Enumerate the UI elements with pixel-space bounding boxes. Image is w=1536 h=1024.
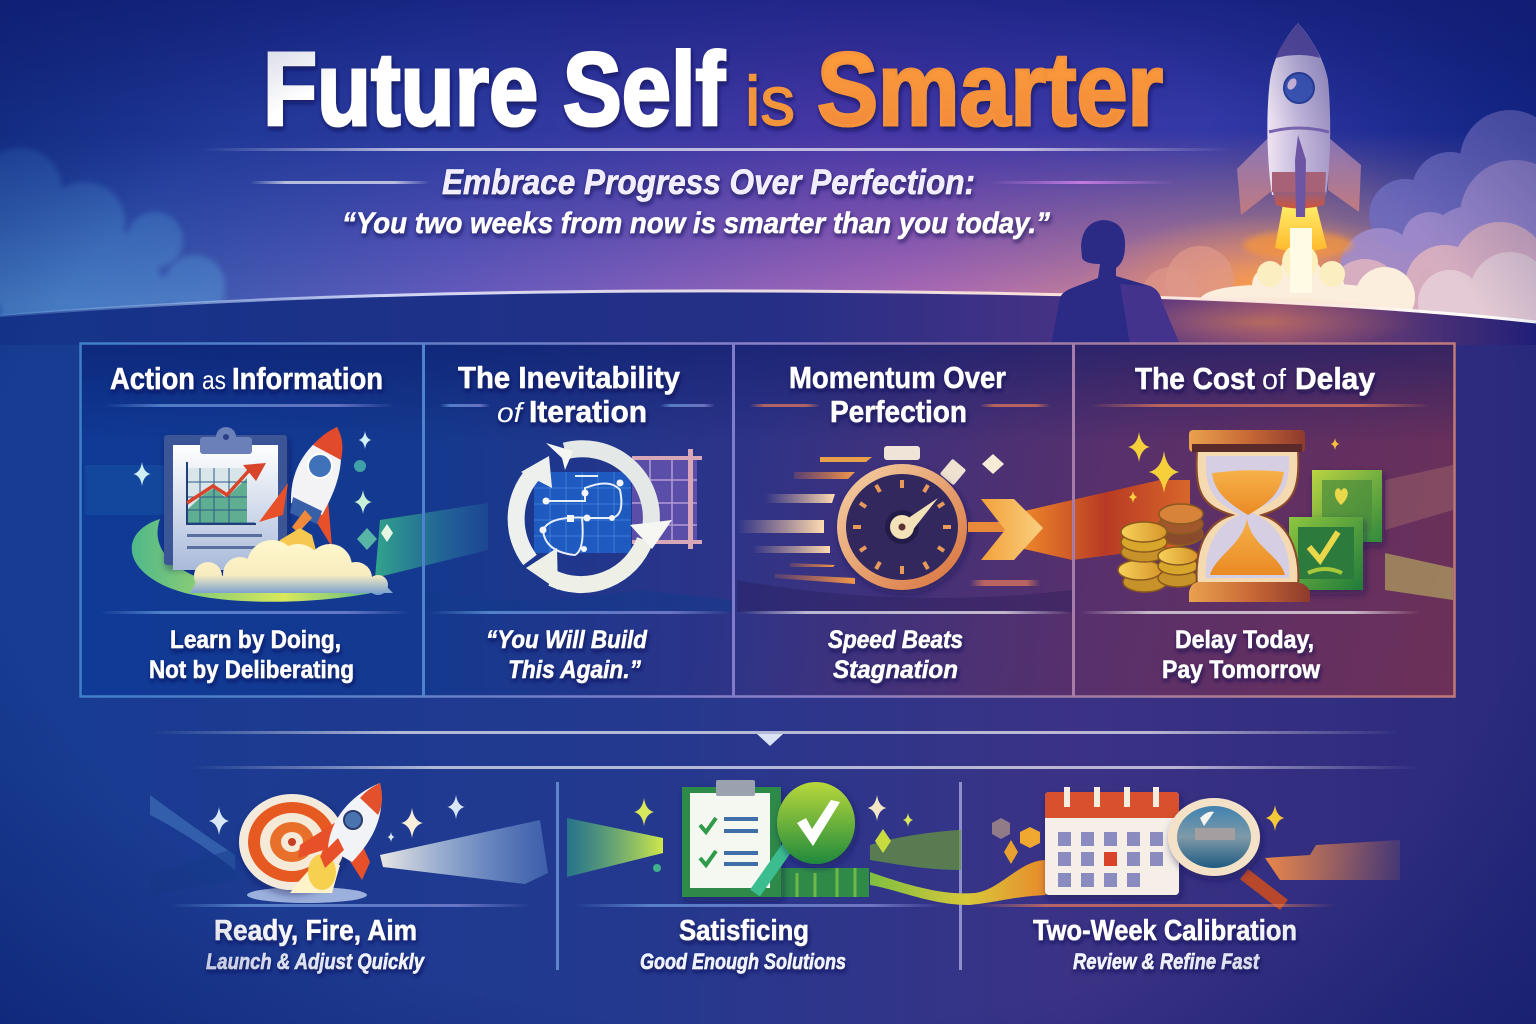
- heading: [458, 360, 681, 429]
- title: [263, 32, 1163, 148]
- caption: “You Will Build: [486, 626, 648, 654]
- label: Review & Refine Fast: [1073, 949, 1260, 974]
- card: momentum over perfection: [737, 360, 1070, 684]
- icon: stopwatch with speed lines: [737, 446, 1043, 590]
- heading: Information: [232, 361, 383, 396]
- caption: Stagnation: [833, 656, 958, 684]
- label: [640, 915, 846, 974]
- caption: Learn by Doing,: [170, 626, 341, 654]
- heading: of: [1262, 364, 1287, 396]
- ribbons: [150, 795, 1400, 905]
- heading: Iteration: [529, 394, 647, 429]
- title: Smarter: [817, 32, 1163, 148]
- card: cost of delay: [1080, 361, 1430, 684]
- heading: as: [202, 365, 226, 395]
- subtitle: Embrace Progress Over Perfection:: [442, 163, 975, 202]
- card: inevitability of iteration: [430, 360, 730, 684]
- clouds: right: [1142, 110, 1536, 334]
- heading: of: [497, 397, 525, 428]
- panel: four concept cards: [80, 343, 1455, 697]
- title: is: [745, 62, 795, 140]
- background: ground: [0, 291, 1536, 1024]
- icon: target and rocket: [209, 783, 465, 903]
- background: sky: [0, 0, 1486, 316]
- label: Ready, Fire, Aim: [214, 915, 417, 947]
- caption: Pay Tomorrow: [1162, 656, 1321, 684]
- label: [206, 915, 425, 974]
- icon: hourglass, coins and cards: [1118, 430, 1382, 602]
- subtitle: “You two weeks from now is smarter than you today.”: [342, 207, 1050, 240]
- heading: [789, 360, 1006, 429]
- caption: This Again.”: [508, 656, 641, 684]
- practice: satisficing: [575, 780, 945, 974]
- caption: [1162, 626, 1321, 684]
- rocket launch: [1237, 23, 1361, 293]
- label: Launch & Adjust Quickly: [206, 949, 425, 974]
- card: action as information: [100, 361, 410, 684]
- heading: [110, 361, 383, 396]
- title: Future Self: [263, 32, 725, 148]
- heading: Delay: [1295, 361, 1376, 396]
- heading: Perfection: [830, 394, 967, 429]
- caption: Delay Today,: [1175, 626, 1314, 654]
- heading: The Inevitability: [458, 360, 681, 395]
- subtitle: [342, 163, 1050, 240]
- practice: ready, fire, aim: [170, 783, 530, 974]
- heading: [1135, 361, 1376, 396]
- label: Satisficing: [679, 915, 809, 947]
- person silhouette: [1051, 220, 1180, 345]
- icon: checklist and check badge: [634, 780, 913, 897]
- panel: three practices: [150, 780, 1400, 974]
- caption: [486, 626, 648, 684]
- arrow: notch pointing down: [757, 734, 783, 746]
- heading: The Cost: [1135, 361, 1255, 396]
- label: Two-Week Calibration: [1033, 915, 1297, 947]
- heading: Momentum Over: [789, 360, 1006, 395]
- icon: calendar and magnifier: [992, 787, 1284, 905]
- caption: Speed Beats: [828, 626, 963, 654]
- caption: [149, 626, 354, 684]
- label: [1033, 915, 1297, 974]
- clouds: left: [0, 148, 230, 330]
- caption: Not by Deliberating: [149, 656, 354, 684]
- heading: Action: [110, 361, 195, 396]
- icon: clipboard, chart and rocket: [132, 427, 393, 602]
- label: Good Enough Solutions: [640, 949, 846, 974]
- caption: [828, 626, 963, 684]
- practice: two-week calibration: [975, 787, 1335, 974]
- icon: iteration cycle over blueprint: [516, 443, 702, 590]
